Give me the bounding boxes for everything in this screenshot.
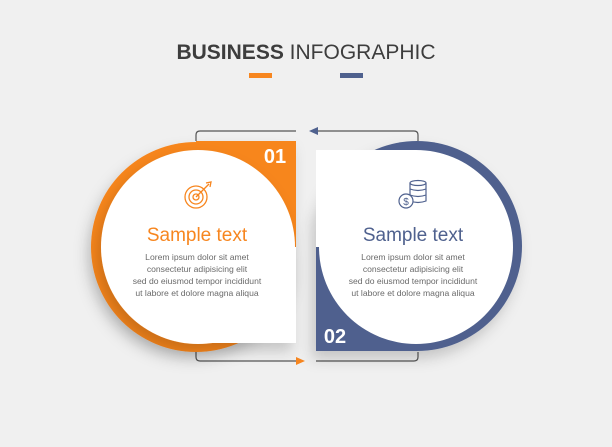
- text block: sed do eiusmod tempor incididunt: [349, 276, 478, 286]
- title: [176, 41, 436, 78]
- text block: [133, 252, 262, 298]
- heading: Sample text: [363, 225, 464, 246]
- text block: ut labore et dolore magna aliqua: [351, 288, 475, 298]
- panel: step 01: [91, 141, 301, 352]
- text block: [349, 252, 478, 298]
- text block: consectetur adipisicing elit: [363, 264, 464, 274]
- heading: Sample text: [147, 225, 248, 246]
- number 02: 02: [324, 326, 346, 348]
- arrow: bottom connector: [196, 352, 418, 365]
- panel: step 02: [312, 141, 522, 351]
- panel: step 02: $: [403, 197, 409, 208]
- icon: coins: [399, 180, 426, 208]
- title: BUSINESS INFOGRAPHIC: [176, 41, 436, 64]
- text block: Lorem ipsum dolor sit amet: [145, 252, 249, 262]
- icon: target: [185, 182, 211, 208]
- arrow: top connector: [196, 127, 418, 141]
- text block: Lorem ipsum dolor sit amet: [361, 252, 465, 262]
- text block: ut labore et dolore magna aliqua: [135, 288, 259, 298]
- text block: sed do eiusmod tempor incididunt: [133, 276, 262, 286]
- number 01: 01: [264, 146, 286, 168]
- text block: consectetur adipisicing elit: [147, 264, 248, 274]
